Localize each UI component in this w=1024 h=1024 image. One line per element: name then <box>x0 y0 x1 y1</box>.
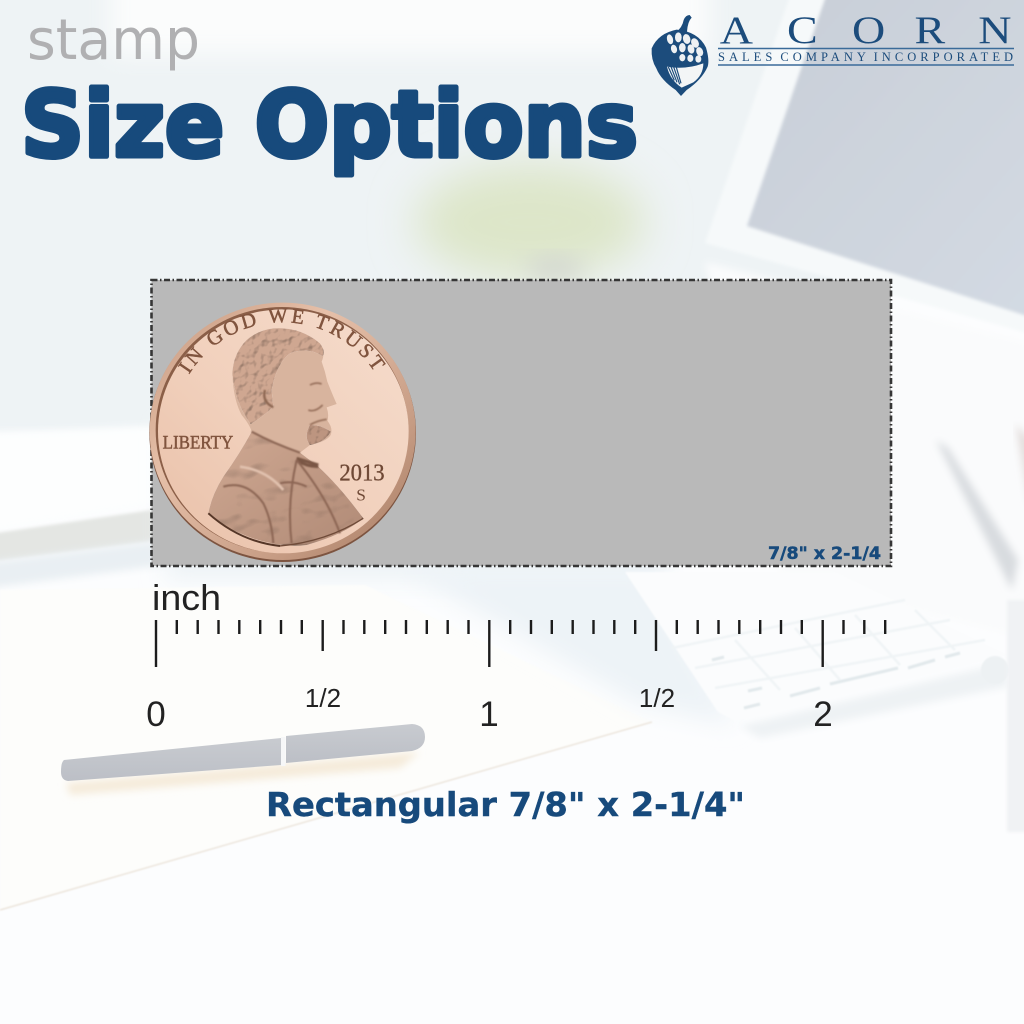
ruler <box>146 577 885 734</box>
pen <box>61 724 425 781</box>
ruler: 2 <box>813 695 833 734</box>
coin: Lincoln penny: IN GOD WE TRUST <box>178 308 386 374</box>
motto <box>173 322 393 432</box>
ruler: 1/2 <box>305 683 341 713</box>
panel: stamp impression area <box>152 280 891 566</box>
ruler: 1/2 <box>639 683 675 713</box>
beard <box>307 425 331 445</box>
pencils and glass <box>936 440 1018 590</box>
face <box>232 328 337 453</box>
desk riser <box>705 262 1024 640</box>
keyboard <box>625 572 1010 738</box>
paper <box>0 585 652 910</box>
heading: Size Options: Size Options <box>21 73 638 178</box>
LIBERTY: LIBERTY <box>163 432 233 453</box>
date: 2013 <box>339 461 385 487</box>
tagline: SALES COMPANY INCORPORATED <box>718 50 1013 64</box>
tick marks <box>156 620 885 667</box>
scale numbers: 0 <box>146 695 166 734</box>
mint mark: S <box>356 486 366 505</box>
shelf <box>0 425 165 530</box>
portrait <box>208 328 363 546</box>
ruler: 1 <box>479 695 499 734</box>
pen shadow <box>66 752 420 795</box>
heading: stamp: stamp <box>27 8 200 73</box>
size label: 7/8" x 2-1/4 <box>768 544 881 563</box>
unit label: inch <box>152 577 221 618</box>
rules <box>718 48 1014 65</box>
coin: Lincoln penny <box>149 302 416 562</box>
logo: Acorn Sales Company Incorporated <box>652 9 1014 96</box>
icon: acorn <box>652 15 708 96</box>
plant <box>415 164 645 280</box>
wordmark: ACORN <box>720 9 1011 52</box>
coat <box>208 432 363 546</box>
monitor <box>705 0 1024 335</box>
hair <box>232 328 324 424</box>
caption: Rectangular 7/8" x 2-1/4" <box>266 785 745 824</box>
